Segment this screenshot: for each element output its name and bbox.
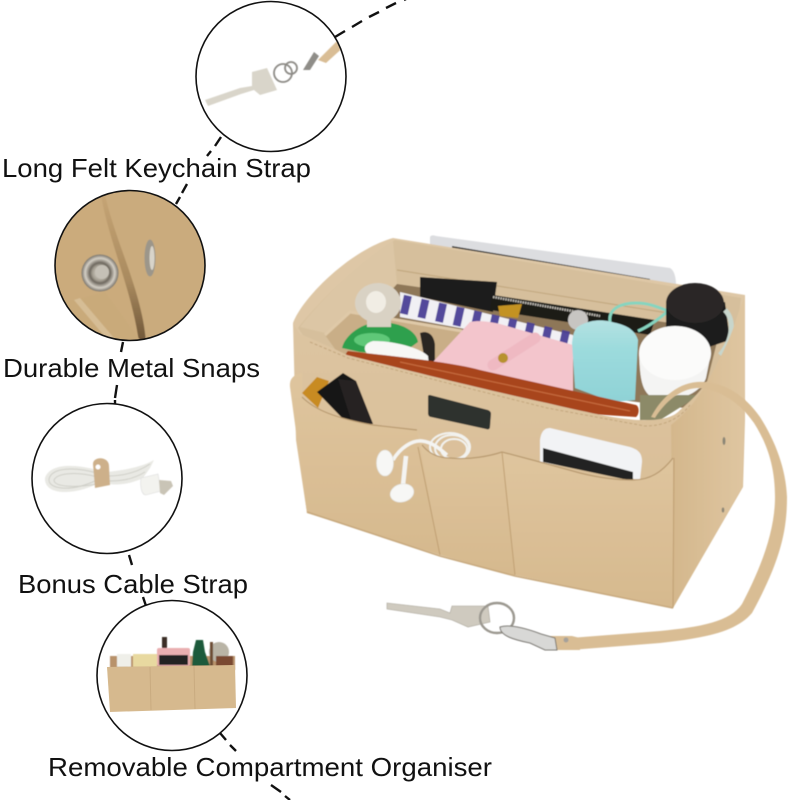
snap stud [82,254,118,292]
black jar [666,283,731,355]
pink wallet [433,321,573,392]
front pockets [290,373,674,608]
strap end tab [545,636,580,650]
tablet [430,235,676,285]
felt strap tab [318,41,340,64]
white compact [365,341,429,366]
left pocket [290,373,440,555]
key [205,68,277,106]
inner left wall [300,241,397,333]
lipstick and gold case [302,373,373,424]
key ring [480,603,514,633]
bag rim and back wall [293,238,745,380]
brown wallet [346,351,639,417]
teal bottle [572,320,638,402]
label: keychain strap: Long Felt Keychain Strap [2,153,311,183]
pocket rim highlights [302,397,673,480]
clasp [303,52,319,70]
felt fold [102,190,210,345]
dark cosmetic stick [420,332,435,362]
organiser felt front [107,665,236,712]
main product: felt organiser [290,235,745,608]
dashed connector line [115,0,410,800]
metal clasp [500,626,557,650]
label: cable strap: Bonus Cable Strap [18,569,248,599]
feature circle: keychain strap [196,2,347,152]
brand label [428,395,491,429]
felt cable tie [93,458,110,488]
label: metal snaps: Durable Metal Snaps [3,353,260,383]
coiled earphone cable [430,433,470,461]
interior shadow [340,284,720,410]
white jar [639,326,711,400]
jar base behind wall [640,395,700,420]
label: removable organiser: Removable Compartment Organiser [48,752,492,782]
top stitching [310,342,690,426]
pocket seams [418,447,674,608]
usb plug [141,474,161,495]
rivets on side [722,437,726,512]
striped cosmetic pouch [400,292,573,349]
felt keychain strap [387,382,787,650]
earphones [376,441,447,505]
snap socket [144,240,156,276]
perfume bottle [342,283,418,355]
feature circle: cable strap [32,404,182,554]
feature circle: metal snaps [55,190,210,345]
phone [540,428,642,481]
front wall felt [293,295,745,608]
mint cord [610,303,668,331]
key [387,603,490,627]
side panel [671,295,745,608]
compartment divider [325,312,462,372]
black box [420,277,497,312]
organiser inner contents [110,637,235,670]
key rings [274,62,297,82]
zipper pouch [490,295,655,335]
middle pocket [418,433,515,576]
coiled cable [45,460,154,492]
silver zip pull [568,310,588,330]
right pocket [502,452,673,608]
feature circle: removable organiser [97,600,247,750]
